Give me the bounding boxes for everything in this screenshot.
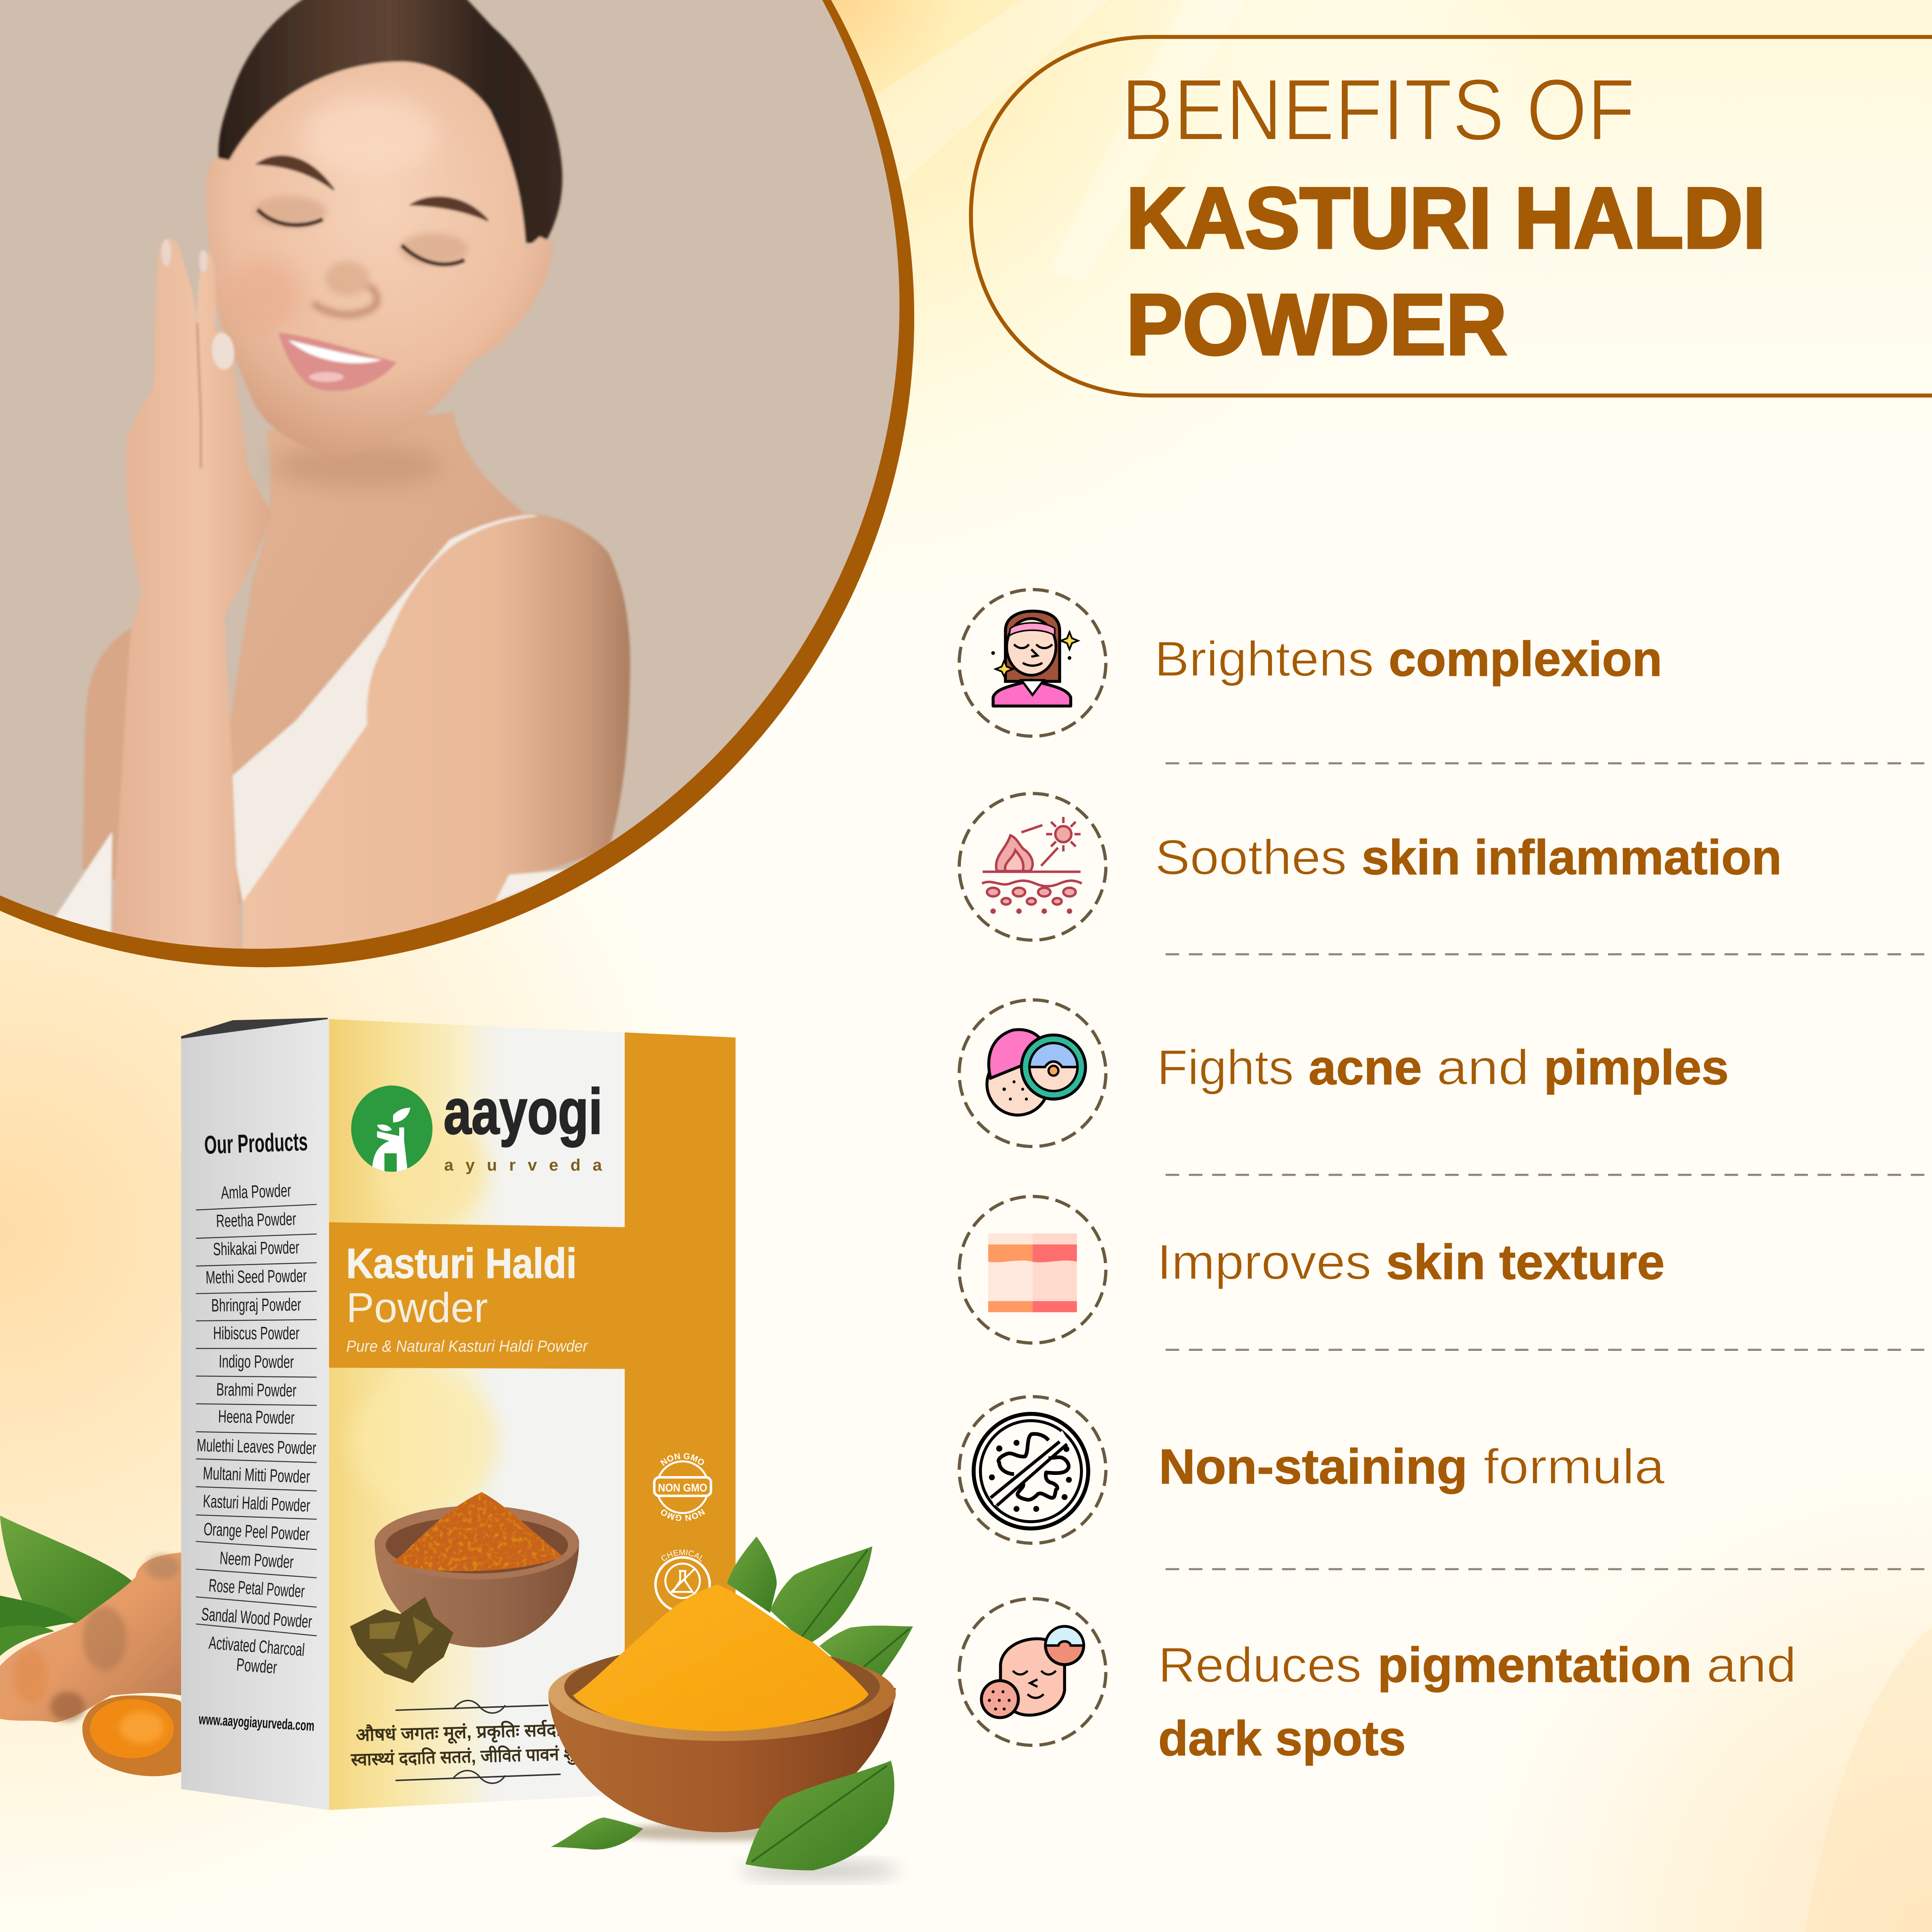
- woman photo: [54, 0, 630, 973]
- icon: woman with glowing skin: [959, 590, 1106, 736]
- Sanskrit verse and ornaments: [350, 1701, 600, 1783]
- heading text: KASTURI HALDI: [1126, 170, 1766, 266]
- label: formula: [1483, 1439, 1665, 1494]
- label: Improves: [1157, 1235, 1371, 1290]
- icon: skin layers: [959, 1196, 1106, 1343]
- bowl body: [548, 1688, 896, 1832]
- front panel: Pure & Natural Kasturi Haldi Powder: [346, 1337, 588, 1355]
- icon: face with pigmentation: [959, 1599, 1106, 1745]
- icon: crossed-out stain: [959, 1396, 1106, 1543]
- side text: product list: Methi Seed Powder: [206, 1265, 307, 1287]
- heading text: [1121, 61, 1766, 373]
- benefit row: Non-staining formula: [959, 1396, 1665, 1543]
- side text: product list: Hibiscus Powder: [213, 1323, 299, 1343]
- side text: product list: Rose Petal Powder: [208, 1575, 305, 1601]
- bowl rim: [548, 1647, 896, 1741]
- side text: product list: www.aayogiayurveda.com: [198, 1711, 315, 1735]
- label: skin texture: [1386, 1235, 1665, 1290]
- side text: product list: [196, 1127, 316, 1735]
- label: pimples: [1544, 1040, 1729, 1095]
- side text: product list: Orange Peel Powder: [203, 1519, 310, 1544]
- heading text: POWDER: [1126, 277, 1507, 373]
- front panel: [329, 1010, 742, 1817]
- orange column: [625, 1029, 742, 1817]
- label: Reduces: [1158, 1638, 1362, 1693]
- side text: product list: Bhringraj Powder: [211, 1294, 301, 1315]
- top flap shadow: [181, 1018, 328, 1043]
- benefit row: Improves skin texture: [959, 1196, 1665, 1343]
- cut slice: [82, 1696, 181, 1776]
- orange title band: [329, 1222, 628, 1369]
- side text: product list: Our Products: [204, 1127, 308, 1160]
- beige photo background: [0, 0, 900, 949]
- label: dark spots: [1158, 1711, 1406, 1766]
- label: Non-staining: [1159, 1439, 1468, 1494]
- hand touching the cheek: [111, 238, 272, 973]
- heading text: BENEFITS OF: [1121, 61, 1635, 158]
- side text: product list: Activated Charcoal: [208, 1633, 305, 1660]
- logo: ayurveda: [444, 1156, 602, 1174]
- title panel: [971, 37, 1932, 396]
- badge: chemical free: CHEMICAL: [660, 1548, 706, 1563]
- side text: product list: Sandal Wood Powder: [201, 1604, 313, 1632]
- label: and: [1437, 1040, 1529, 1095]
- left leaves: [0, 1515, 132, 1656]
- label: Brightens: [1155, 632, 1374, 687]
- side text: product list: Multani Mitti Powder: [202, 1463, 310, 1487]
- side text: product list: Heena Powder: [218, 1406, 295, 1428]
- product name: Kasturi Haldi: [346, 1240, 577, 1287]
- side text: product list: Amla Powder: [221, 1180, 291, 1203]
- heading outline: [971, 37, 1932, 396]
- side text: product list: Neem Powder: [219, 1548, 294, 1572]
- photo panel: smiling woman in a circular frame: [0, 0, 914, 973]
- dried turmeric pieces: [350, 1597, 453, 1683]
- leaves behind bowl: [727, 1536, 913, 1689]
- side text: product list: Brahmi Powder: [216, 1379, 296, 1400]
- turmeric root and leaves: [0, 1515, 181, 1776]
- brown circle frame: [0, 0, 914, 967]
- label: Fights: [1157, 1040, 1294, 1095]
- icon: sun and inflamed skin: [959, 794, 1106, 940]
- side text: product list: Powder: [236, 1654, 278, 1677]
- benefit row: Brightens complexion: [959, 590, 1662, 736]
- badge: non GMO: [654, 1451, 711, 1523]
- label: Soothes: [1155, 830, 1347, 885]
- benefit row: Fights acne and pimples: [959, 1000, 1729, 1146]
- side panel: [181, 1019, 329, 1810]
- eyebrows, eyes, nose and lips: [228, 96, 488, 391]
- small wooden bowl with powder: [374, 1492, 579, 1647]
- side text: product list: Reetha Powder: [216, 1209, 296, 1231]
- side text: product list: Mulethi Leaves Powder: [196, 1435, 316, 1458]
- side text: product list: Shikakai Powder: [213, 1237, 299, 1259]
- benefit row: Reduces pigmentation and dark spots: [959, 1599, 1796, 1766]
- icon: face with acne and magnifier: [959, 1000, 1106, 1146]
- label: complexion: [1389, 632, 1662, 687]
- front leaves: [745, 1761, 895, 1871]
- badge: non GMO: NON GMO: [658, 1482, 707, 1494]
- badge: non GMO: NON GMO: [659, 1507, 706, 1523]
- side text: product list: Kasturi Haldi Powder: [202, 1491, 311, 1515]
- Sanskrit verse and ornaments: स्वास्थ्यं ददाति सततं, जीवितं पावनं शुभम्: [350, 1743, 600, 1771]
- label: skin inflammation: [1362, 830, 1782, 885]
- benefit row: Soothes skin inflammation: [959, 794, 1782, 940]
- Sanskrit verse and ornaments: औषधं जगतः मूलं, प्रकृतिः सर्वदा हि: [355, 1719, 581, 1747]
- label: acne: [1308, 1040, 1422, 1095]
- badge: non GMO: NON GMO: [659, 1451, 706, 1468]
- logo: [351, 1076, 602, 1174]
- logo: aayogi: [444, 1076, 602, 1148]
- turmeric powder bowl with leaves: [548, 1536, 913, 1878]
- label: pigmentation: [1378, 1638, 1692, 1693]
- badge: chemical free: [655, 1548, 710, 1612]
- label: and: [1706, 1638, 1796, 1693]
- front panel: Powder: [346, 1284, 488, 1331]
- powder mound: [573, 1585, 869, 1731]
- root: [0, 1553, 181, 1723]
- side text: product list: Indigo Powder: [219, 1351, 294, 1372]
- product box: [181, 1010, 742, 1817]
- shadows: [604, 1823, 850, 1841]
